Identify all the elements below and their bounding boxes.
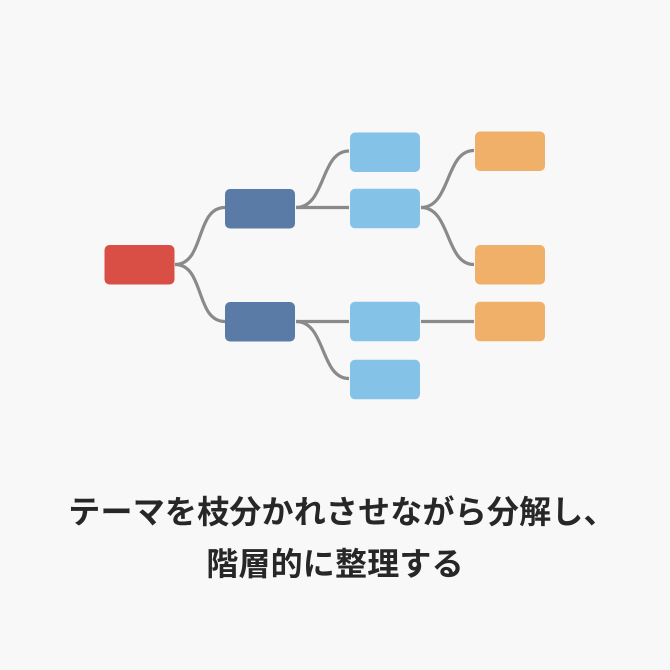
- branch node: lower: [225, 302, 295, 342]
- sub-branch node 2: [350, 189, 420, 228]
- leaf node 1: [475, 132, 545, 171]
- caption line 1: テーマを枝分かれさせながら分解し、: [68, 494, 616, 530]
- leaf node 3: [475, 302, 545, 341]
- caption line 2: 階層的に整理する: [206, 546, 464, 582]
- leaf node 2: [475, 245, 545, 284]
- branch node: upper: [225, 189, 295, 228]
- sub-branch node 3: [350, 302, 420, 341]
- sub-branch node 1: [350, 132, 420, 172]
- root node: [104, 245, 174, 284]
- sub-branch node 4: [350, 360, 420, 399]
- connectors: [175, 150, 474, 378]
